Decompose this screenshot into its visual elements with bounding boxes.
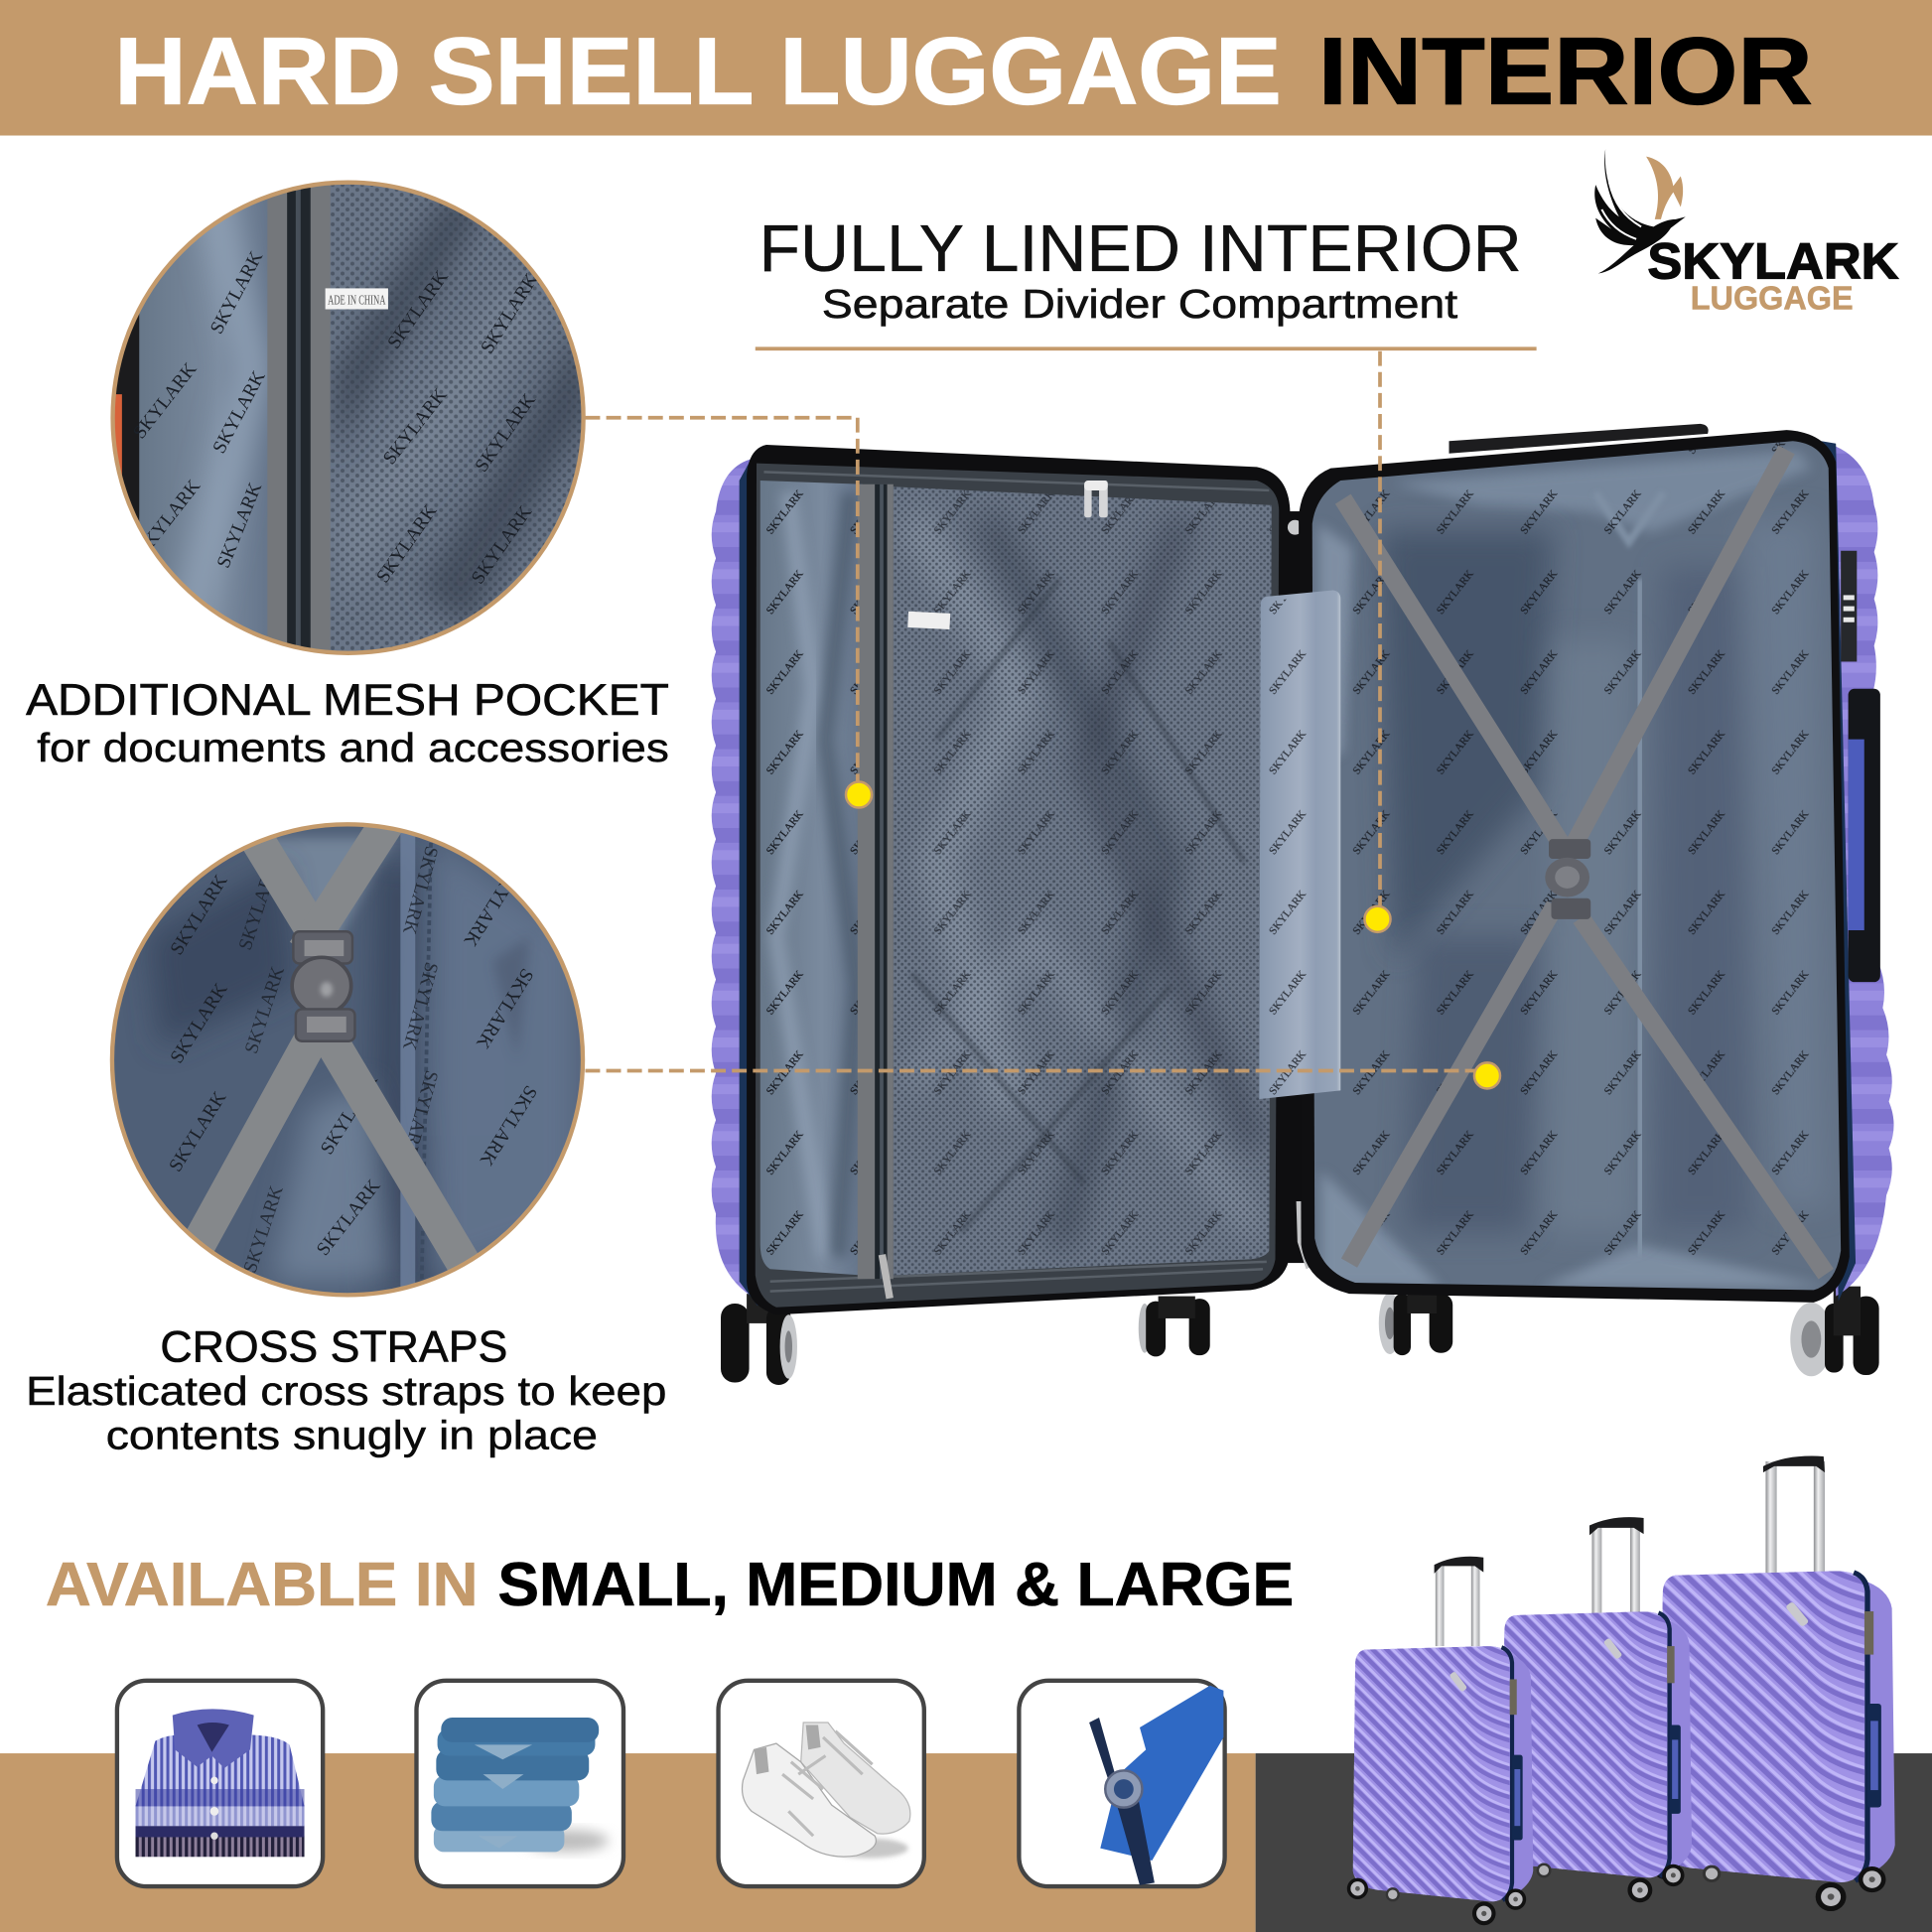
lower zipper pull [879, 1254, 894, 1299]
telescopic handle [1589, 1517, 1644, 1614]
callout line: mesh pocket [586, 418, 858, 788]
liner watermark text: SKYLARK [379, 385, 452, 469]
cross straps [1343, 450, 1826, 1274]
top zipper pulls [1084, 481, 1108, 517]
luggage set: large [1644, 1394, 1895, 1932]
callout dot: fully lined interior [1364, 906, 1391, 932]
zip band stripes [763, 472, 1269, 1292]
logo: Skylark Luggage [1594, 149, 1899, 318]
lining watermark text: SKYLARK [398, 960, 442, 1052]
card: folded jeans [416, 1681, 623, 1886]
suitcase body [1341, 1501, 1533, 1932]
lining watermark text [165, 844, 541, 1276]
logo wordmark: SKYLARK [1647, 232, 1899, 289]
lining watermark text: SKYLARK [240, 1183, 288, 1276]
small label tag [907, 612, 950, 629]
heading: fully lined interior: FULLY LINED INTERIOR [759, 211, 1522, 286]
heading: available sizes [46, 1551, 1294, 1619]
liner watermark text: SKYLARK [372, 501, 442, 587]
lining watermark text: SKYLARK [476, 1081, 541, 1170]
card: white sneakers [719, 1681, 924, 1886]
left navy edge [740, 454, 758, 1307]
left half zip band [756, 464, 1279, 1308]
liner watermark text: SKYLARK [213, 480, 266, 571]
icon: strap buckle [292, 931, 354, 1041]
mesh pocket label tag: ADE IN CHINA [328, 293, 386, 308]
navy side band [1821, 441, 1856, 1302]
lining watermark text: SKYLARK [167, 872, 232, 959]
heading: available sizes: AVAILABLE IN [46, 1551, 479, 1619]
combination lock [1841, 551, 1857, 661]
open suitcase illustration [712, 424, 1894, 1385]
detail circle: mesh pocket [111, 179, 592, 665]
right interior lining [1312, 438, 1845, 1294]
card: folded shirts [117, 1681, 323, 1886]
callout line: cross straps [586, 1069, 1478, 1072]
zipper band [858, 484, 894, 1279]
lining watermark text: SKYLARK [398, 1068, 442, 1161]
lining watermark text: SKYLARK [235, 861, 283, 953]
liner watermark text: SKYLARK [209, 367, 270, 457]
lining watermark text: SKYLARK [460, 863, 525, 950]
text block: cross straps [26, 1322, 666, 1457]
callout dot: cross straps [1474, 1062, 1500, 1088]
suitcase body [1489, 1460, 1692, 1932]
text block: cross straps: CROSS STRAPS [160, 1322, 507, 1371]
text block: additional mesh pocket: ADDITIONAL MESH POCKET [26, 676, 669, 725]
icon: wristwatch [1089, 1718, 1155, 1885]
liner watermark text [129, 248, 542, 588]
text block: additional mesh pocket [26, 676, 669, 770]
liner watermark text: SKYLARK [207, 248, 267, 338]
lining watermark text: SKYLARK [313, 1175, 385, 1260]
icon: jeans stack [431, 1718, 609, 1852]
sizes: SMALL, MEDIUM & LARGE [497, 1551, 1294, 1619]
callout line: fully lined interior [1378, 351, 1382, 905]
left half frame [747, 445, 1290, 1314]
liner watermark text: SKYLARK [472, 390, 540, 476]
description: for documents and accessories [37, 725, 669, 770]
side handle [1849, 689, 1880, 982]
divider flap [1259, 590, 1340, 1099]
top carry handle [1449, 424, 1709, 454]
header band [0, 0, 1932, 136]
lining watermark text: SKYLARK [167, 980, 232, 1067]
description line two: contents snugly in place [106, 1412, 598, 1457]
bottom band: dark [1256, 1753, 1932, 1932]
logo sub-wordmark: LUGGAGE [1691, 281, 1854, 318]
mesh pocket label tag [326, 288, 388, 310]
icon: blue tie [1100, 1686, 1223, 1861]
liner watermark text: SKYLARK [468, 502, 536, 588]
heading: fully lined interior [759, 211, 1522, 327]
right half frame [1299, 430, 1850, 1303]
icon: sneakers [743, 1723, 910, 1859]
lining watermark text: SKYLARK [472, 965, 537, 1052]
callout dot: mesh pocket [846, 781, 872, 808]
card: tie and watch [1019, 1681, 1225, 1886]
title: hard shell luggage: HARD SHELL LUGGAGE [114, 18, 1282, 124]
liner watermark text: SKYLARK [384, 267, 453, 352]
heading rule [756, 347, 1537, 350]
mesh pocket [894, 486, 1276, 1276]
suitcase body [1644, 1394, 1895, 1932]
wheels [721, 1287, 1879, 1385]
telescopic handle [1763, 1456, 1825, 1575]
liner watermark text: SKYLARK [129, 359, 202, 443]
icon: shirt stack [136, 1709, 305, 1857]
luggage set: medium [1489, 1460, 1692, 1932]
liner panel [760, 475, 865, 1282]
subheading: Separate Divider Compartment [822, 281, 1458, 327]
liner watermark text: SKYLARK [133, 476, 205, 560]
icon: bird [1594, 149, 1686, 274]
right shell: purple ribs [1819, 441, 1894, 1297]
detail circle: cross straps [111, 819, 592, 1300]
title: interior: INTERIOR [1318, 18, 1813, 124]
strap buckle [1545, 839, 1590, 919]
lining watermark text: SKYLARK [165, 1088, 230, 1175]
lining watermark text: SKYLARK [398, 844, 442, 936]
bottom band: tan [0, 1753, 1256, 1932]
liner watermark text: SKYLARK [477, 270, 542, 357]
lining watermark text: SKYLARK [317, 1071, 382, 1159]
luggage set: small [1341, 1501, 1533, 1932]
telescopic handle [1435, 1557, 1483, 1646]
left shell: purple ribs [712, 459, 758, 1300]
lining watermark text: SKYLARK [241, 964, 289, 1056]
description line one: Elasticated cross straps to keep [26, 1368, 666, 1414]
hinge [1287, 511, 1313, 1269]
